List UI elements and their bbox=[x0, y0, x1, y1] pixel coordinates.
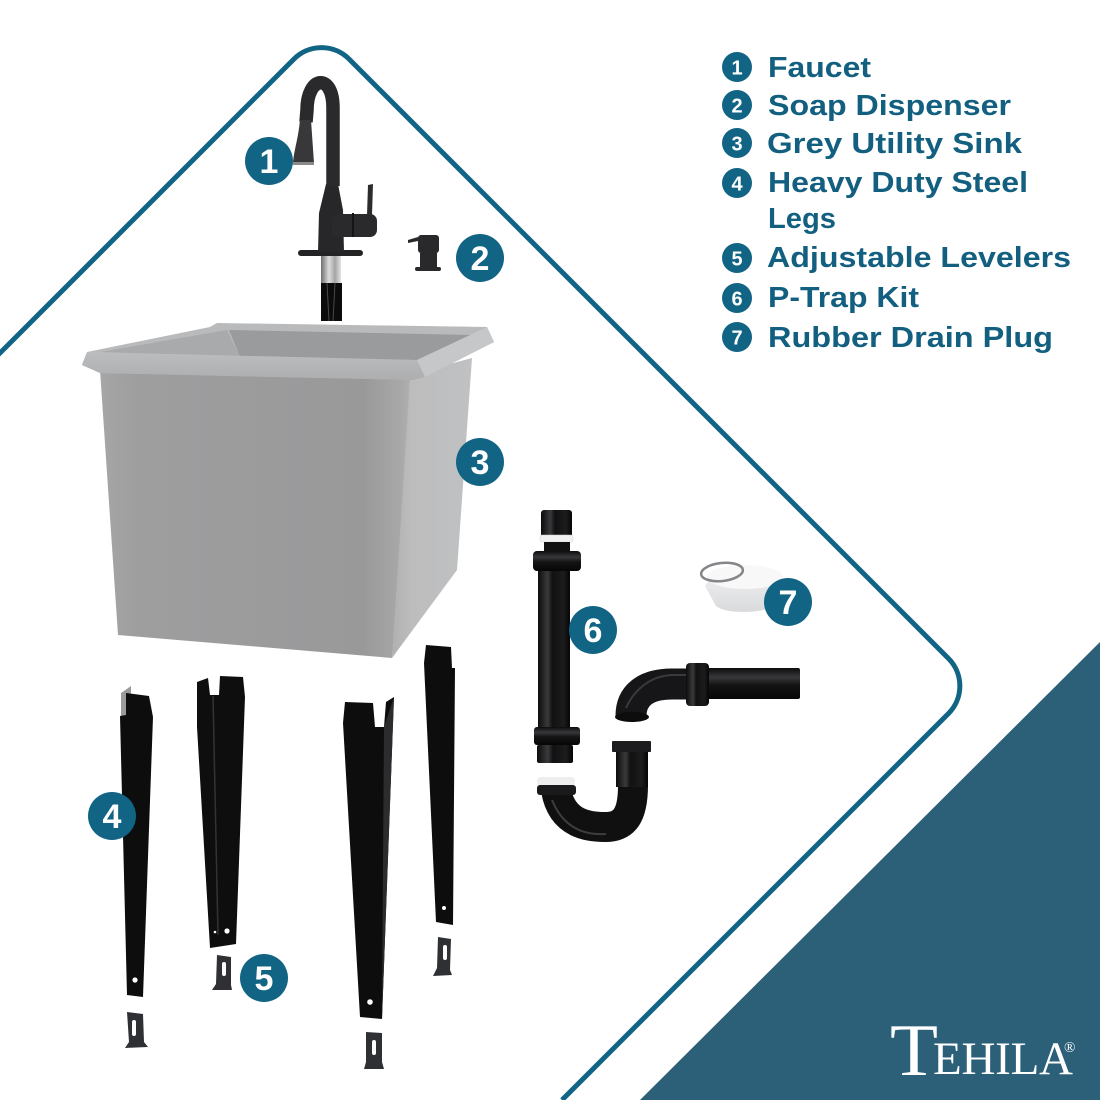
legend item 1: 1 bbox=[731, 58, 743, 80]
leveler two bbox=[212, 955, 232, 990]
leveler four bbox=[433, 937, 452, 976]
legend item 6: 6 bbox=[731, 288, 743, 310]
legend item 7: 7 bbox=[731, 328, 743, 350]
legend item 4: Legs bbox=[768, 203, 836, 235]
tehila logo: EHILA bbox=[933, 1033, 1073, 1085]
numbered badge 6: 6 bbox=[584, 612, 602, 650]
numbered badge 2 bbox=[456, 234, 504, 282]
p-trap kit bbox=[533, 510, 800, 834]
legend item 5: Adjustable Levelers bbox=[767, 242, 1071, 274]
legend item 6 bbox=[722, 282, 919, 314]
tailpiece pipe bbox=[533, 510, 581, 763]
leveler three bbox=[364, 1032, 384, 1069]
leg four bbox=[424, 645, 455, 925]
tehila logo bbox=[890, 1010, 1075, 1092]
legend item 2: Soap Dispenser bbox=[768, 90, 1011, 122]
leg three bbox=[343, 697, 394, 1019]
parts list legend bbox=[722, 52, 1071, 354]
legend item 4: Heavy Duty Steel bbox=[768, 167, 1028, 199]
legend item 4 bbox=[722, 167, 1028, 235]
rubber drain plug bbox=[700, 561, 786, 612]
legend item 4: 4 bbox=[731, 174, 743, 196]
numbered badge 2: 2 bbox=[471, 240, 489, 278]
legend item 3: 3 bbox=[731, 134, 743, 156]
numbered badge 6 bbox=[569, 606, 617, 654]
tehila logo: T bbox=[890, 1010, 938, 1092]
elbow pipe bbox=[615, 663, 800, 722]
numbered badge 5: 5 bbox=[255, 960, 273, 998]
soap dispenser bbox=[408, 235, 441, 271]
legend item 1: Faucet bbox=[768, 52, 871, 84]
legend item 7: Rubber Drain Plug bbox=[768, 322, 1053, 354]
heavy duty steel legs bbox=[120, 645, 455, 1019]
tehila logo: ® bbox=[1064, 1040, 1075, 1056]
numbered badge 1 bbox=[245, 137, 293, 185]
adjustable levelers bbox=[125, 937, 452, 1069]
legend item 2: 2 bbox=[731, 96, 743, 118]
numbered badge 1: 1 bbox=[260, 143, 278, 181]
numbered badge 3: 3 bbox=[471, 444, 489, 482]
legend item 5: 5 bbox=[731, 248, 743, 270]
numbered badge 3 bbox=[456, 438, 504, 486]
legend item 6: P-Trap Kit bbox=[768, 282, 919, 314]
j-bend bbox=[537, 741, 651, 834]
leg one bbox=[120, 686, 153, 997]
grey utility sink bbox=[82, 323, 494, 658]
numbered badge 4: 4 bbox=[103, 798, 122, 836]
numbered badge 4 bbox=[88, 792, 136, 840]
numbered badge 7 bbox=[764, 578, 812, 626]
numbered badge 5 bbox=[240, 954, 288, 1002]
leg two bbox=[197, 676, 245, 948]
legend item 1 bbox=[722, 52, 871, 84]
numbered badge 7: 7 bbox=[779, 584, 797, 622]
corner triangle background bbox=[640, 642, 1100, 1100]
legend item 3: Grey Utility Sink bbox=[767, 128, 1023, 160]
leveler one bbox=[125, 1012, 148, 1048]
faucet bbox=[293, 83, 377, 321]
